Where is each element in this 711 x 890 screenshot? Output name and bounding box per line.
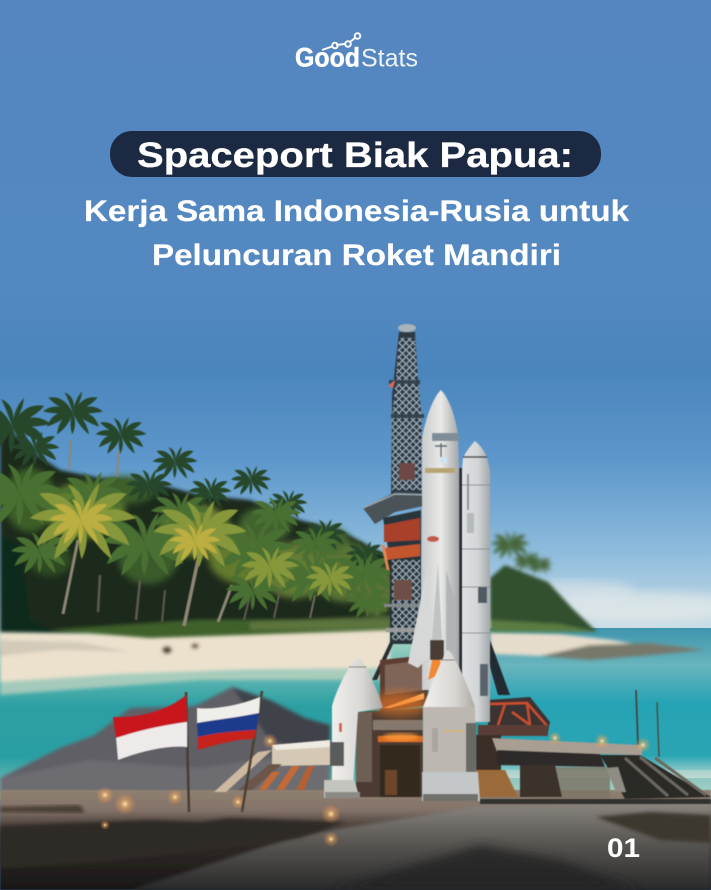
russia flag: [197, 691, 262, 812]
title text: Spaceport Biak Papua:: [137, 136, 573, 175]
tropical palm forest: [0, 392, 395, 638]
gray sand mound: [0, 687, 330, 795]
subtitle line one: Kerja Sama Indonesia-Rusia untuk: [84, 195, 629, 228]
palm crowns, front yellow-green: [30, 483, 354, 596]
logo wordmark: Good: [295, 42, 360, 72]
left platform and ramps: [214, 740, 330, 792]
palm crowns, back row: [0, 392, 384, 569]
indonesia flag: [113, 692, 189, 812]
foliage blobs: [4, 468, 395, 616]
launch ground: [0, 790, 711, 890]
right truss gantry: [478, 640, 550, 736]
bridge lights: [548, 731, 651, 753]
beach sand: [0, 628, 705, 695]
ground lights: [96, 733, 341, 847]
launch base structure: [356, 708, 518, 797]
right bridge and ramp: [492, 690, 711, 799]
sky background: [0, 0, 711, 640]
sea water: [0, 628, 711, 800]
small front booster: [422, 650, 480, 801]
side booster: [462, 441, 490, 722]
palm crowns, middle row: [0, 462, 395, 618]
logo chart line icon: [322, 33, 360, 50]
palm trunks: [63, 440, 315, 626]
small left booster: [324, 657, 383, 798]
launch tower: [363, 324, 438, 712]
title pill: [110, 131, 601, 177]
right distant palm island: [490, 531, 597, 632]
page number: 01: [607, 833, 640, 863]
forest canopy mass: [0, 420, 395, 638]
subtitle line two: Peluncuran Roket Mandiri: [152, 239, 561, 272]
logo wordmark stats: Stats: [361, 44, 418, 72]
engine fire glow: [372, 692, 428, 741]
GoodStats logo: [295, 33, 360, 72]
main rocket: [408, 390, 463, 708]
